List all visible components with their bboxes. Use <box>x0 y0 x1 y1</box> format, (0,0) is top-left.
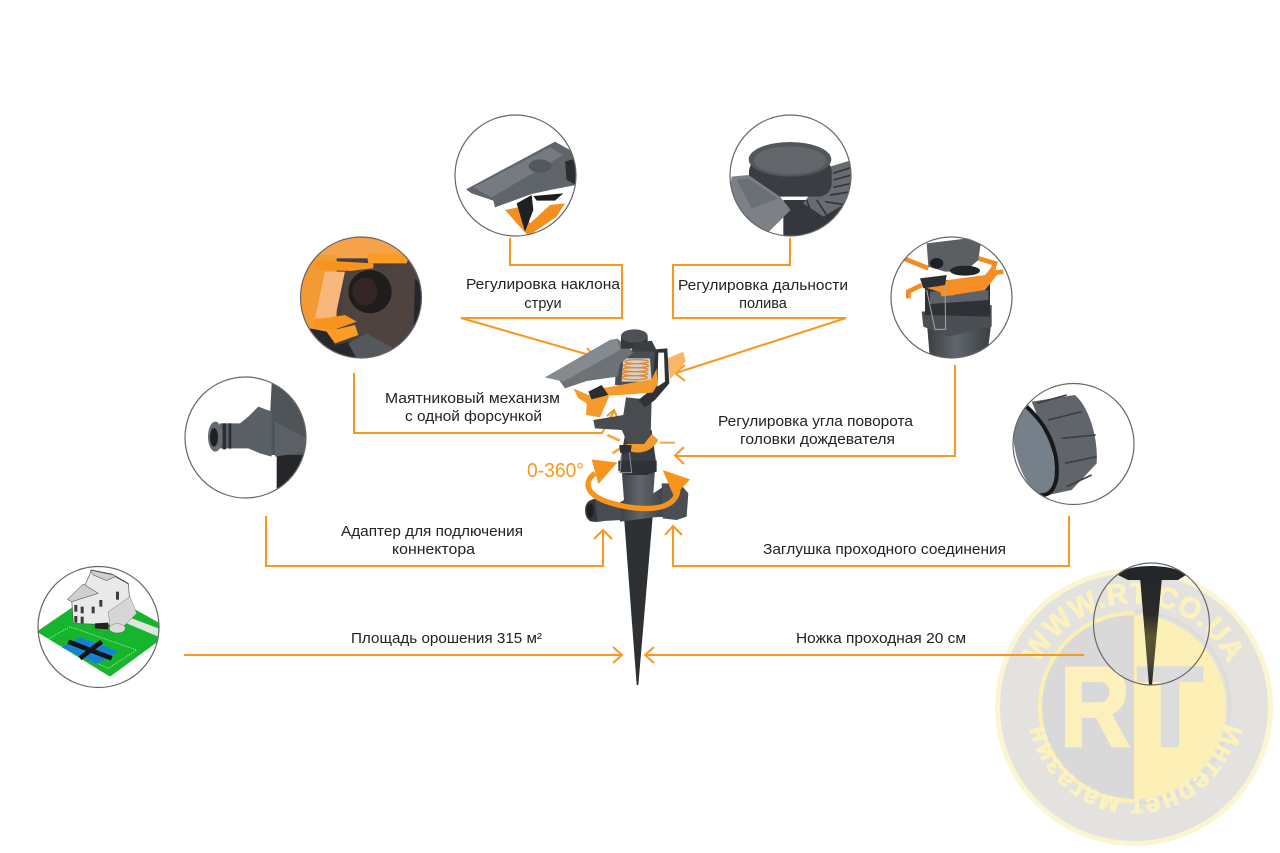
callout line: jet tilt adjustment <box>461 238 622 364</box>
watermark: RT internet shop seal <box>995 568 1273 846</box>
spike <box>624 517 653 685</box>
pool <box>62 637 118 664</box>
orange block <box>668 352 686 379</box>
label: pendulum mechanism: с одной форсункой <box>405 409 542 425</box>
spring <box>622 358 652 382</box>
label: through connection plug: Заглушка проходного соединения <box>763 542 1006 558</box>
house <box>72 570 130 625</box>
orange hammer <box>573 388 609 417</box>
circle: jet tilt detail <box>455 115 576 236</box>
circle: range adjustment detail <box>730 115 853 236</box>
label: pendulum mechanism: Маятниковый механизм <box>385 391 560 407</box>
label: jet tilt adjustment: Регулировка наклона <box>466 277 621 293</box>
lever <box>545 339 634 388</box>
upper body <box>593 397 652 444</box>
circle: connector adapter detail <box>185 377 307 498</box>
column behind spring <box>615 350 657 387</box>
callout line: connector adapter <box>266 516 612 566</box>
orange arm <box>602 368 657 396</box>
product: impulse sprinkler <box>545 329 690 685</box>
label: range adjustment: Регулировка дальности <box>678 278 848 294</box>
watermark: RT internet shop seal: T <box>1137 644 1203 770</box>
label: connector adapter: Адаптер для подлючения <box>341 524 523 540</box>
spike <box>1140 577 1162 685</box>
rotation arrow <box>588 459 690 509</box>
lawn <box>37 607 160 677</box>
collar nuts <box>618 461 657 475</box>
top cap <box>621 329 657 352</box>
spike head <box>1118 566 1186 580</box>
label: rotation angle adjustment: Регулировка угла поворота <box>718 414 914 430</box>
label: rotation angle adjustment: головки дождевателя <box>740 432 895 448</box>
callout line: pendulum mechanism <box>354 373 618 433</box>
body tube and T joint <box>585 470 688 522</box>
circle: pendulum mechanism detail <box>300 235 423 359</box>
circle: irrigation area <box>37 566 160 688</box>
circle: spike leg detail <box>1094 563 1210 685</box>
label: rotation range: 0-360° <box>527 460 584 482</box>
label: range adjustment: полива <box>739 296 788 312</box>
callout line: spike leg <box>645 647 1084 663</box>
watermark: RT internet shop seal: R <box>1060 644 1130 770</box>
label: connector adapter: коннектора <box>392 542 476 558</box>
callout line: through connection plug <box>665 516 1069 566</box>
callout line: range adjustment <box>673 238 846 381</box>
label: spike leg: Ножка проходная 20 см <box>796 631 966 647</box>
loop frame <box>638 348 669 407</box>
orange ring and tabs <box>607 434 675 473</box>
circle: rotation angle adjustment detail <box>891 237 1012 360</box>
label: irrigation area: Площадь орошения 315 м² <box>351 631 542 647</box>
cross arrows <box>68 642 112 658</box>
callout line: rotation angle adjustment <box>675 365 955 464</box>
neck <box>620 430 656 462</box>
watermark: RT internet shop seal: WWW.RT.CO.UA <box>1021 582 1242 663</box>
watermark: RT internet shop seal: Интернет магазин <box>1030 724 1243 814</box>
circle: through connection plug detail <box>1013 384 1134 504</box>
callout line: irrigation area <box>184 647 622 663</box>
label: jet tilt adjustment: струи <box>524 296 562 312</box>
